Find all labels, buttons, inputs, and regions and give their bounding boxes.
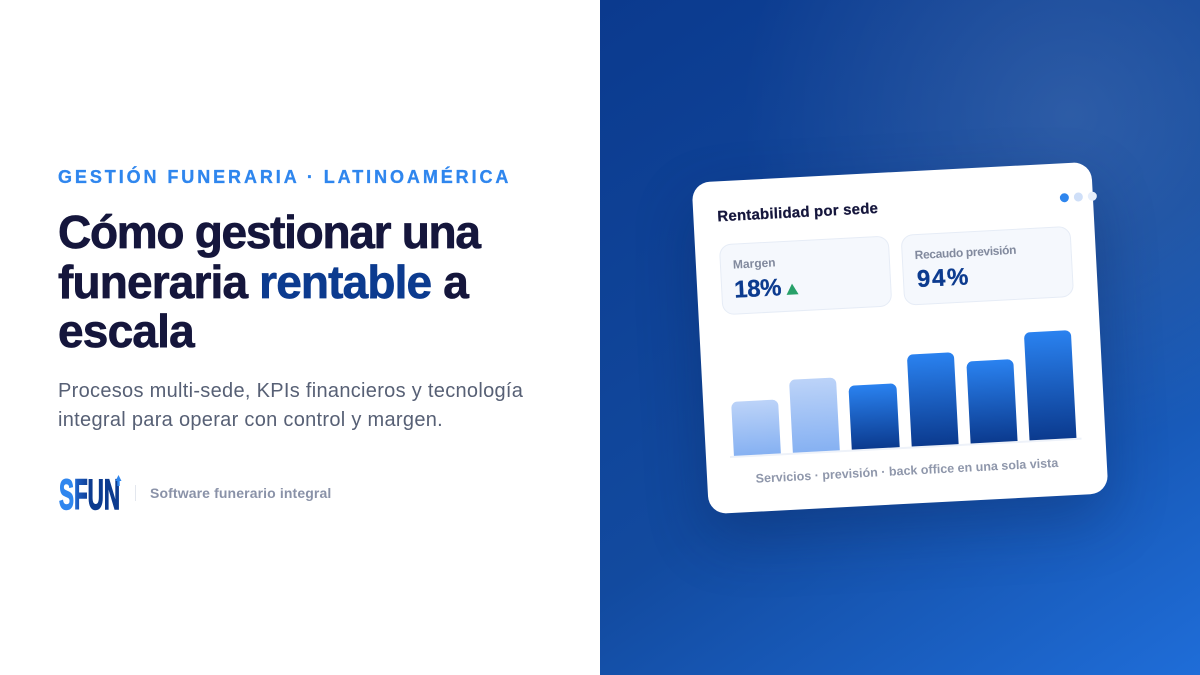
panel: dashboard card — [692, 161, 1108, 514]
chart caption: Servicios · previsión · back office en una sola vista — [755, 455, 1059, 485]
subtitle: integral para operar con control y margen. — [58, 408, 443, 430]
card title: Rentabilidad por sede — [717, 199, 879, 225]
logo tagline: Software funerario integral — [150, 485, 331, 501]
title: Cómo gestionar una — [58, 206, 480, 258]
window dots — [1060, 192, 1097, 202]
KPI: margen: 18% — [734, 274, 782, 303]
KPI: margen — [719, 235, 892, 315]
KPI: margen: Margen — [733, 254, 776, 271]
subtitle — [58, 380, 523, 430]
subtitle: Procesos multi-sede, KPIs financieros y tecnología — [58, 380, 523, 402]
title: escala — [58, 305, 194, 357]
title — [58, 206, 482, 357]
KPI: recaudo prevision: 94% — [916, 263, 971, 293]
KPI: recaudo prevision — [901, 225, 1074, 305]
KPI: recaudo prevision: Recaudo previsión — [914, 242, 1016, 262]
icon: up triangle — [786, 283, 799, 294]
title: funeraria rentable a — [58, 256, 468, 308]
eyebrow: GESTIÓN FUNERARIA · LATINOAMÉRICA — [58, 167, 511, 187]
bar chart — [723, 313, 1082, 457]
panel: blue background — [600, 0, 1200, 675]
